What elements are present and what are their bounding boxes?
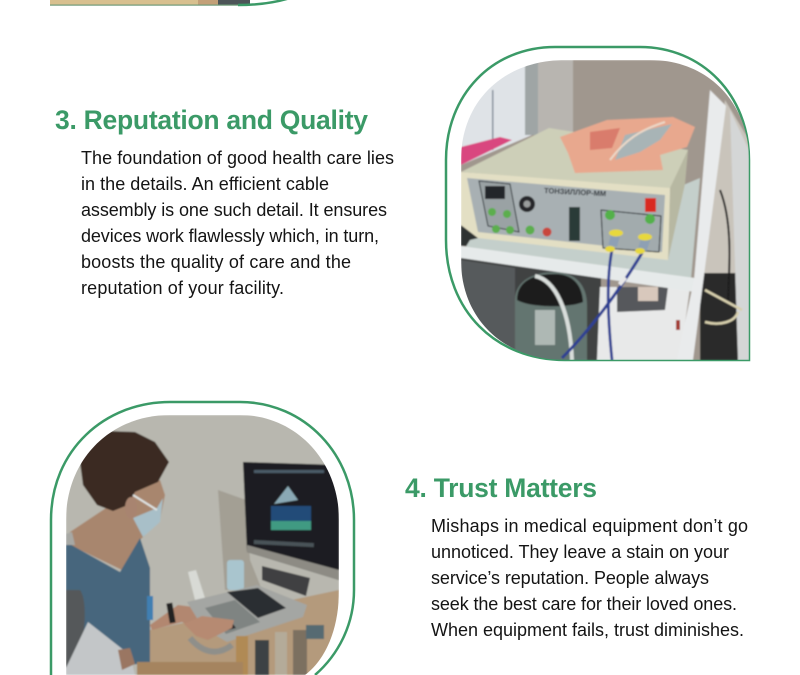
text block: trust matters: service’s reputation. People always	[431, 568, 709, 588]
text block: trust matters	[431, 516, 748, 640]
photo: device scene	[461, 60, 749, 360]
text block: reputation and quality: assembly is one such detail. It ensures	[81, 200, 387, 220]
text block: trust matters: unnoticed. They leave a stain on your	[431, 542, 729, 562]
text block: trust matters: When equipment fails, trust diminishes.	[431, 620, 744, 640]
text block: reputation and quality: reputation of your facility.	[81, 278, 284, 298]
text block: reputation and quality: The foundation of good health care lies	[81, 148, 394, 168]
text block: reputation and quality: in the details. An efficient cable	[81, 174, 329, 194]
previous section photo remnant	[50, 0, 290, 6]
photo panel: clinician using ultrasound	[51, 402, 354, 675]
text block: trust matters: seek the best care for their loved ones.	[431, 594, 737, 614]
heading: 3. Reputation and Quality: 3. Reputation and Quality	[55, 105, 368, 135]
text block: reputation and quality	[81, 148, 394, 298]
photo: device scene: ТОНЗИЛЛОР-ММ	[544, 186, 606, 198]
photo: ultrasound scene	[66, 415, 339, 675]
photo panel: medical device on shelf	[446, 47, 749, 360]
heading: 4. Trust Matters: 4. Trust Matters	[405, 473, 597, 503]
photo frame outline	[446, 47, 749, 360]
text block: trust matters: Mishaps in medical equipment don’t go	[431, 516, 748, 536]
photo frame outline	[51, 402, 354, 675]
text block: reputation and quality: devices work flawlessly which, in turn,	[81, 226, 379, 246]
text block: reputation and quality: boosts the quality of care and the	[81, 252, 351, 272]
